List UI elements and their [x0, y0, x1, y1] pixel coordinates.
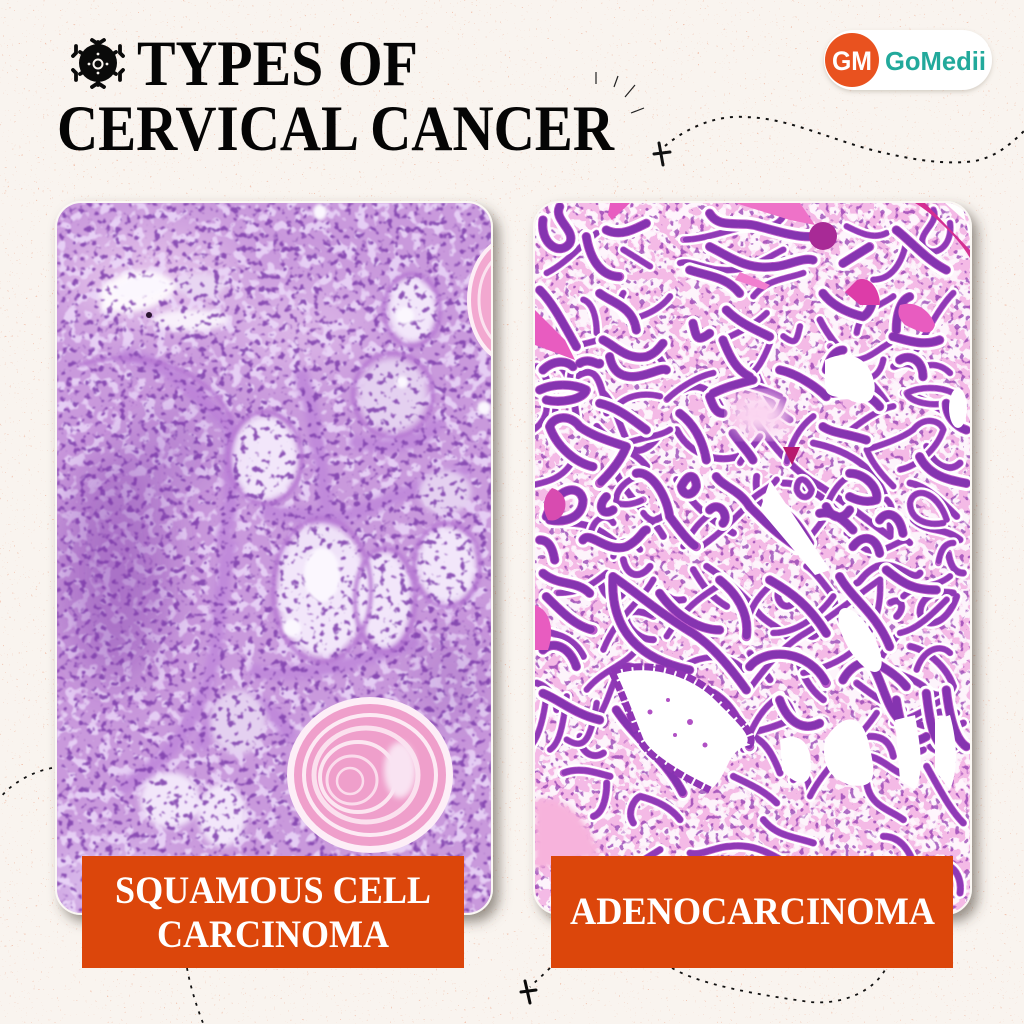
pale cell nests	[100, 271, 476, 847]
nest lumens	[112, 204, 491, 637]
logo: GoMedii: GoMedii	[885, 46, 986, 76]
title: TYPES OF	[137, 28, 418, 100]
secondary glands filling the gaps	[537, 320, 963, 906]
large lumen epithelium	[612, 667, 751, 790]
dark cell texture	[57, 203, 491, 913]
logo: GoMedii	[824, 30, 992, 90]
pale cell flecks	[57, 203, 491, 913]
pink stroma	[535, 203, 970, 913]
nest rims	[80, 274, 480, 662]
pyknotic dot	[146, 312, 152, 318]
label: adenocarcinoma	[551, 856, 953, 968]
title: CERVICAL CANCER	[57, 93, 615, 165]
keratin pearl, right edge	[467, 244, 491, 356]
debris in large lumen	[648, 698, 708, 748]
panel: adenocarcinoma image	[527, 201, 972, 915]
logo: GoMedii: GM	[832, 46, 872, 76]
icon: virus	[73, 40, 123, 87]
smooth stroma veins	[120, 355, 470, 790]
icon: cross, bottom	[521, 981, 536, 1003]
white lumens	[612, 203, 970, 790]
dotted curves, bottom	[0, 768, 886, 1023]
tissue base	[57, 203, 491, 913]
label: squamous cell carcinoma: SQUAMOUS CELL	[115, 869, 431, 912]
pale stroma, centre	[730, 393, 790, 437]
main glands	[540, 207, 966, 793]
panel: squamous cell carcinoma image	[52, 199, 508, 931]
dotted curve with cross, top right	[654, 117, 1024, 165]
eosinophilic secretions	[535, 203, 970, 650]
label: squamous cell carcinoma: CARCINOMA	[157, 913, 389, 956]
dense dark zone, lower left	[60, 405, 490, 730]
keratin pearl	[287, 697, 453, 853]
title	[57, 28, 615, 165]
pale stroma, bottom left	[535, 799, 600, 870]
label: adenocarcinoma: ADENOCARCINOMA	[570, 890, 935, 933]
label: squamous cell carcinoma	[82, 856, 464, 968]
icon: sparkle rays	[596, 72, 644, 113]
